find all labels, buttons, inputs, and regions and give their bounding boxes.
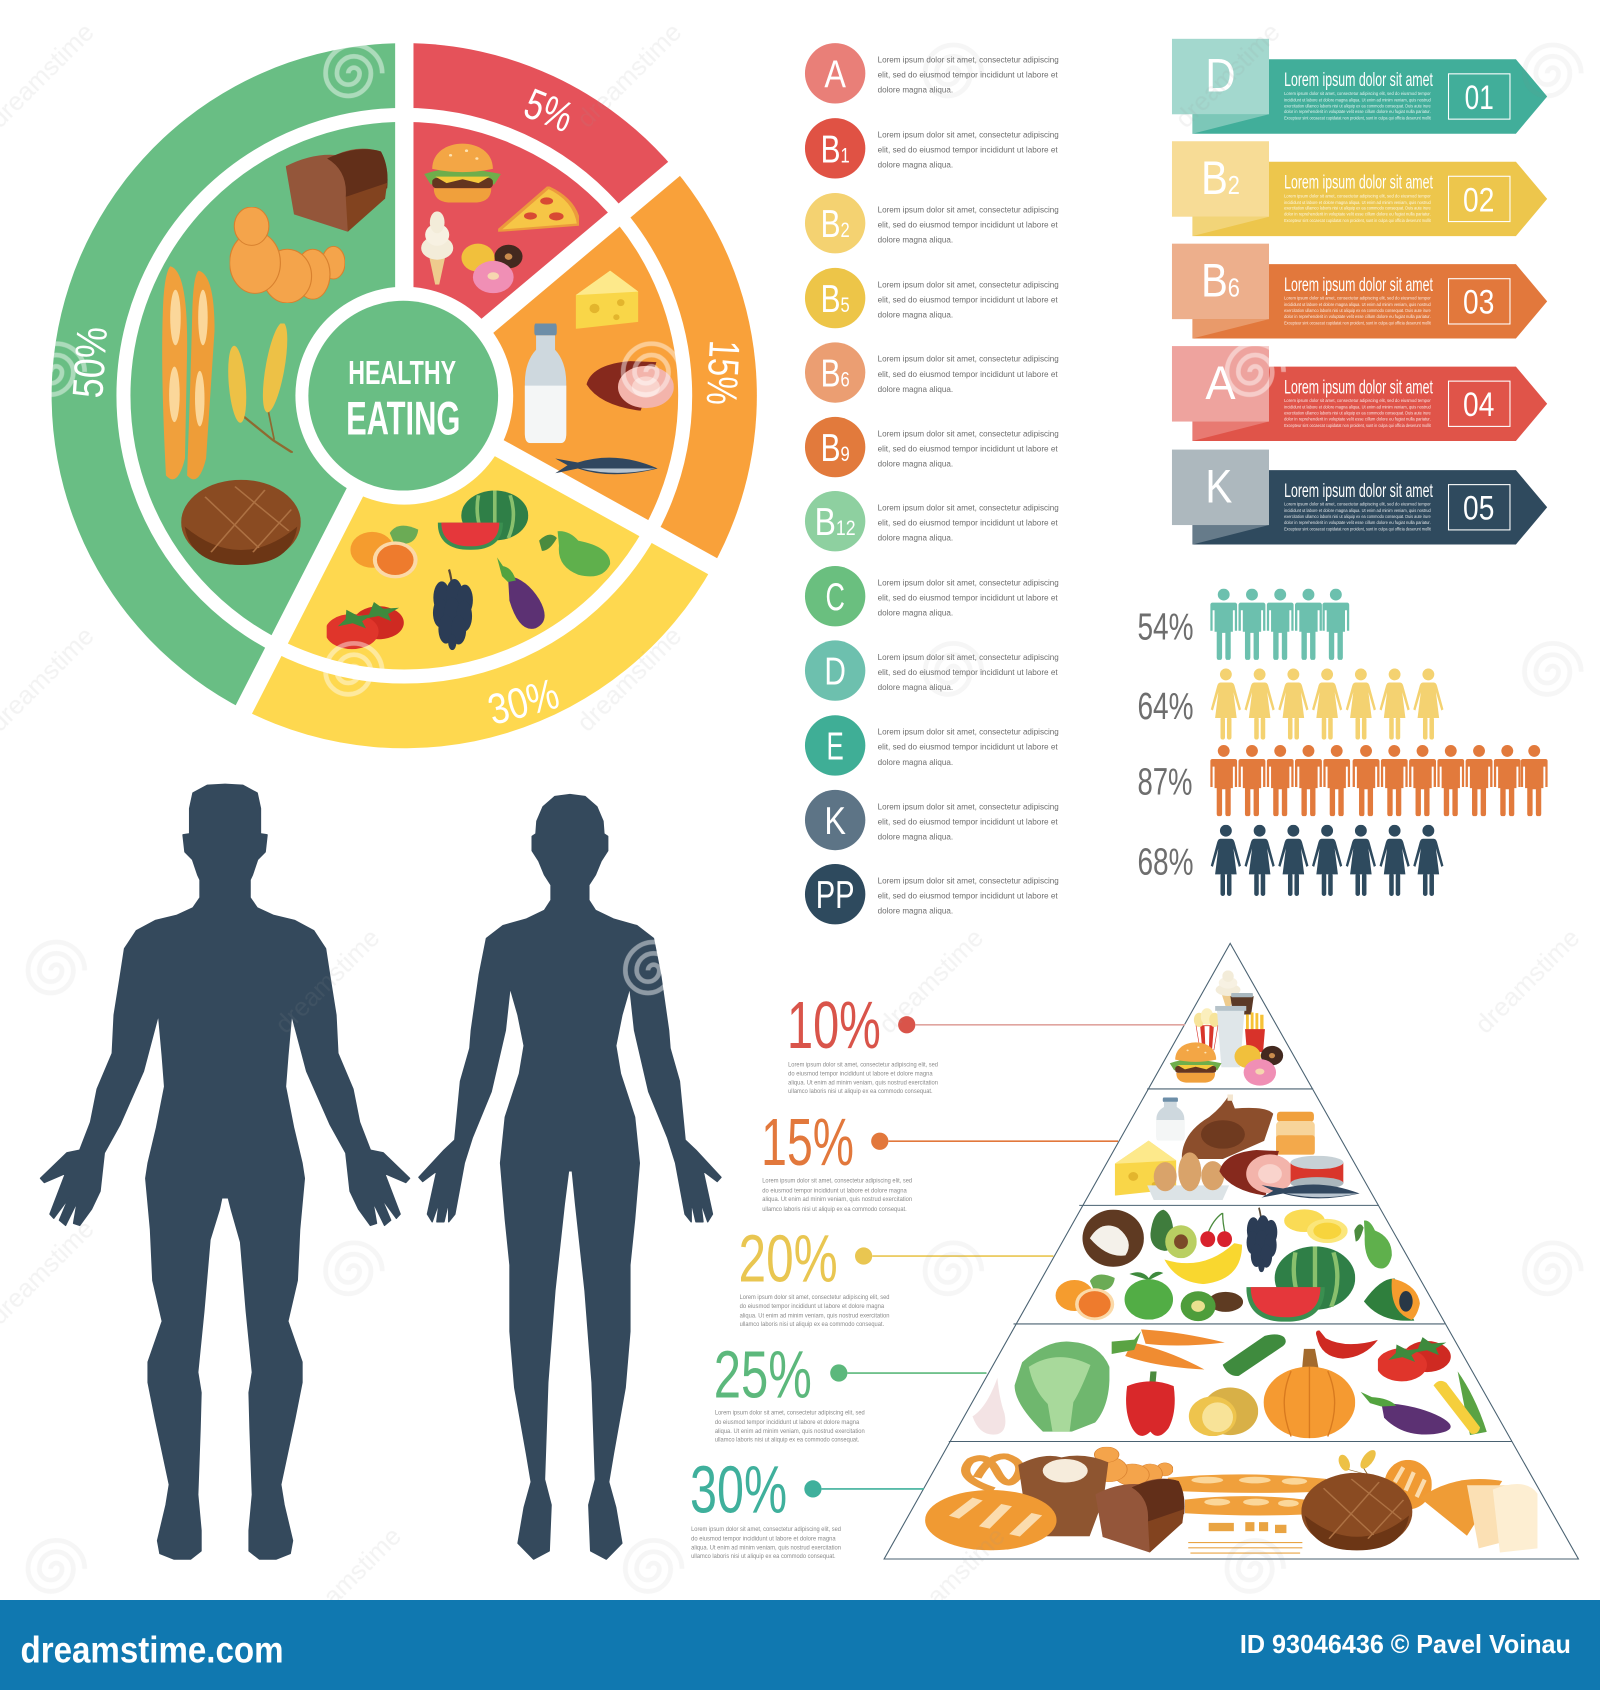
ribbon 01 D: D [1205,50,1236,103]
vitamin B12: elit, sed do eiusmod tempor incididunt ut labore et [878,517,1058,527]
vitamin B6: Lorem ipsum dolor sit amet, consectetur adipiscing [878,354,1059,364]
vitamin B2: dolore magna aliqua. [878,235,953,245]
callout: 15%: Lorem ipsum dolor sit amet, consectetur adipiscing elit, sed [762,1179,912,1185]
chart: food pyramid [884,943,1578,1559]
vitamin PP [805,864,1059,924]
callout: 30%: ullamco laboris nisi ut aliquip ex ea commodo consequat. [691,1554,836,1560]
ribbon 04 A [1172,346,1547,441]
ribbon 05 K: incididunt ut labore et dolore magna aliqua. Ut enim ad minim veniam, quis nostrud [1284,508,1431,514]
icon: fish [555,458,658,474]
vitamin B1: dolore magna aliqua. [878,160,953,170]
vitamin B1: Lorem ipsum dolor sit amet, consectetur adipiscing [878,130,1059,140]
icon: burger [424,144,501,202]
watermark text: dreamstime [572,622,687,737]
icon: baguettes [162,266,215,479]
ribbon 03 B6 [1172,244,1547,339]
ribbon 03 B6: Lorem ipsum dolor sit amet, consectetur adipiscing elit, sed do eiusmod tempor [1284,296,1431,302]
callout: 30%: Lorem ipsum dolor sit amet, consectetur adipiscing elit, sed [691,1527,841,1533]
vitamin K [805,790,1059,850]
vitamin C: Lorem ipsum dolor sit amet, consectetur adipiscing [878,577,1059,587]
callout: 20%: do eiusmod tempor incididunt ut labore et dolore magna [740,1304,885,1310]
row: 68% women [1137,825,1443,896]
vitamin K: elit, sed do eiusmod tempor incididunt ut labore et [878,816,1058,826]
ribbon 02 B2: 02 [1463,181,1494,219]
icon: milk bottle [525,323,566,443]
footer logo: dreamstime.com [20,1630,284,1671]
ribbon 01 D: dolor in reprehenderit in voluptate velit esse cillum dolore eu fugiat nulla pariatur. [1284,109,1431,115]
vitamin B1: B1 [821,128,850,171]
segment: 5% red [404,43,674,396]
vitamin B2: Lorem ipsum dolor sit amet, consectetur adipiscing [878,204,1059,214]
ribbon 01 D: Lorem ipsum dolor sit amet, consectetur adipiscing elit, sed do eiusmod tempor [1284,91,1431,97]
icon: pizza [498,187,579,231]
callout: 15%: do eiusmod tempor incididunt ut labore et dolore magna [762,1188,907,1194]
icon: wheat [225,319,293,453]
callout: 10%: aliqua. Ut enim ad minim veniam, quis nostrud exercitation [788,1081,938,1087]
vitamin B9: B9 [821,427,850,470]
icon: grapes [433,569,473,650]
ribbon 03 B6: B6 [1201,254,1240,307]
ribbon 02 B2: dolor in reprehenderit in voluptate velit esse cillum dolore eu fugiat nulla pariatur. [1284,212,1431,218]
heading: healthy eating [346,355,460,445]
vitamin B9: elit, sed do eiusmod tempor incididunt ut labore et [878,443,1058,453]
icon: oranges [350,526,418,578]
callout: 20%: aliqua. Ut enim ad minim veniam, quis nostrud exercitation [740,1313,889,1319]
callout: 15%: 15% [761,1105,854,1180]
chart: healthy eating wheel [52,27,757,748]
row: 64% women [1137,668,1443,740]
icon: tomatoes [325,602,404,649]
icon: ice cream [421,211,453,285]
ribbon 02 B2: Lorem ipsum dolor sit amet [1284,172,1433,194]
vitamin B12: B12 [815,501,856,544]
vitamin E [805,715,1059,776]
icon: brown loaf [286,149,388,232]
vitamin D: dolore magna aliqua. [878,682,953,692]
ribbon 04 A: dolor in reprehenderit in voluptate velit esse cillum dolore eu fugiat nulla pariatur. [1284,416,1431,422]
callout: 20%: Lorem ipsum dolor sit amet, consectetur adipiscing elit, sed [740,1295,889,1301]
vitamin K: dolore magna aliqua. [878,831,953,841]
ribbon 02 B2: B2 [1201,152,1240,205]
vitamin B6: dolore magna aliqua. [878,384,953,394]
ribbon 01 D: 01 [1465,79,1494,117]
ribbon 04 A: Lorem ipsum dolor sit amet [1284,377,1433,399]
row: 68% women: 68% [1137,840,1194,882]
ribbon 03 B6: exercitation ullamco laboris nisi ut aliquip ex ea commodo consequat. Duis aute irure [1284,308,1431,314]
row: 64% women: 64% [1137,685,1194,727]
vitamin D: elit, sed do eiusmod tempor incididunt ut labore et [878,667,1058,677]
ribbon 05 K: K [1205,460,1233,513]
segment: 15% orange [404,169,757,567]
callout: 25%: do eiusmod tempor incididunt ut labore et dolore magna [715,1420,860,1426]
callout: 20%: ullamco laboris nisi ut aliquip ex ea commodo consequat. [740,1322,884,1328]
label: 50%: 50% [64,325,117,400]
vitamin B5: dolore magna aliqua. [878,310,953,320]
ribbon 03 B6: dolor in reprehenderit in voluptate velit esse cillum dolore eu fugiat nulla pariatur. [1284,314,1431,320]
row: 87% men [1137,745,1548,817]
ribbon 02 B2: Lorem ipsum dolor sit amet, consectetur adipiscing elit, sed do eiusmod tempor [1284,193,1431,199]
chart: people pictograms [1137,589,1548,896]
heading: healthy eating: EATING [346,392,460,445]
label: 5%: 5% [518,80,580,142]
silhouette: male body [41,784,410,1559]
vitamin B2 [805,193,1059,253]
vitamin B1: elit, sed do eiusmod tempor incididunt ut labore et [878,145,1058,155]
watermark text: dreamstime [572,18,687,134]
label: 15%: 15% [697,339,748,406]
vitamin B5: elit, sed do eiusmod tempor incididunt ut labore et [878,294,1058,304]
callout: 15%: aliqua. Ut enim ad minim veniam, quis nostrud exercitation [762,1197,912,1203]
ribbon 02 B2: exercitation ullamco laboris nisi ut aliquip ex ea commodo consequat. Duis aute irure [1284,206,1431,212]
vitamin B12: Lorem ipsum dolor sit amet, consectetur adipiscing [878,502,1059,512]
vitamin A: dolore magna aliqua. [878,85,953,95]
vitamin B1 [805,118,1059,179]
vitamin A: Lorem ipsum dolor sit amet, consectetur adipiscing [878,55,1059,65]
ribbon 04 A: A [1205,357,1236,410]
icon: pear [539,531,610,576]
ribbon 05 K: Lorem ipsum dolor sit amet [1284,480,1433,502]
ribbon 05 K: Lorem ipsum dolor sit amet, consectetur adipiscing elit, sed do eiusmod tempor [1284,502,1431,508]
ribbon 01 D: incididunt ut labore et dolore magna aliqua. Ut enim ad minim veniam, quis nostrud [1284,97,1431,103]
callout: 25%: Lorem ipsum dolor sit amet, consectetur adipiscing elit, sed [715,1411,865,1417]
callout: 30%: aliqua. Ut enim ad minim veniam, quis nostrud exercitation [691,1545,841,1551]
footer band [0,1600,1600,1690]
ribbon 04 A: incididunt ut labore et dolore magna aliqua. Ut enim ad minim veniam, quis nostrud [1284,405,1431,411]
watermark text: dreamstime [1170,18,1286,134]
ribbon 04 A: Lorem ipsum dolor sit amet, consectetur adipiscing elit, sed do eiusmod tempor [1284,398,1431,404]
ribbon 05 K: dolor in reprehenderit in voluptate velit esse cillum dolore eu fugiat nulla pariatur. [1284,520,1431,526]
vitamin D: D [824,651,846,694]
watermark text: dreamstime [1470,924,1585,1039]
vitamin B2: elit, sed do eiusmod tempor incididunt ut labore et [878,219,1058,229]
vitamin A: elit, sed do eiusmod tempor incididunt ut labore et [878,70,1058,80]
callout: 30%: 30% [690,1453,787,1528]
vitamin B5: B5 [821,278,850,321]
callout: 10%: 10% [787,988,881,1063]
vitamin C: dolore magna aliqua. [878,608,953,618]
vitamin K: K [824,800,846,843]
ribbon 02 B2: incididunt ut labore et dolore magna aliqua. Ut enim ad minim veniam, quis nostrud [1284,200,1431,206]
vitamin E: E [827,725,844,768]
callout: 10%: do eiusmod tempor incididunt ut labore et dolore magna [788,1071,933,1077]
icon: round bread [181,480,301,565]
tier 3: fruit [1056,1208,1420,1322]
heading: healthy eating: HEALTHY [348,355,456,392]
silhouette: female body [419,795,721,1559]
vitamin B5 [805,268,1059,328]
ribbon 01 D: Lorem ipsum dolor sit amet [1284,69,1433,91]
callout: 15% [761,1105,1118,1213]
vitamin PP: Lorem ipsum dolor sit amet, consectetur adipiscing [878,875,1059,885]
callout: 25%: aliqua. Ut enim ad minim veniam, quis nostrud exercitation [715,1429,865,1435]
callout: 25% [714,1337,987,1443]
vitamin D [805,640,1059,701]
ribbon 01 D: exercitation ullamco laboris nisi ut aliquip ex ea commodo consequat. Duis aute irure [1284,103,1431,109]
ribbon 05 K: exercitation ullamco laboris nisi ut aliquip ex ea commodo consequat. Duis aute irure [1284,514,1431,520]
vitamin B12 [805,491,1059,551]
ribbon 05 K: 05 [1463,490,1494,528]
watermark text: dreamstime [270,924,385,1039]
row: 54% men: 54% [1137,605,1194,647]
callout: 15%: ullamco laboris nisi ut aliquip ex ea commodo consequat. [762,1207,907,1213]
ribbon 03 B6: Excepteur sint occaecat cupidatat non proident, sunt in culpa qui officia deserunt mollit [1284,321,1431,327]
watermark text: dreamstime [895,1522,1011,1638]
vitamin B6 [805,342,1059,403]
ribbon 04 A: exercitation ullamco laboris nisi ut aliquip ex ea commodo consequat. Duis aute irure [1284,411,1431,417]
callout: 25%: 25% [714,1337,812,1412]
vitamin A [805,43,1059,104]
watermark text: dreamstime [292,1522,407,1638]
ribbon 04 A: Excepteur sint occaecat cupidatat non proident, sunt in culpa qui officia deserunt mollit [1284,423,1431,429]
callout: 10% [787,988,1185,1095]
vitamin D: Lorem ipsum dolor sit amet, consectetur adipiscing [878,652,1059,662]
icon: eggplant [497,557,545,629]
vitamin B5: Lorem ipsum dolor sit amet, consectetur adipiscing [878,279,1059,289]
list: vitamins [805,43,1059,924]
center circle [308,301,498,491]
ribbon 01 D [1172,39,1547,134]
vitamin B9: dolore magna aliqua. [878,459,953,469]
ribbon 03 B6: 03 [1463,284,1494,322]
watermark text: dreamstime [874,924,989,1039]
icon: cheese [576,271,638,329]
segment: 30% yellow [244,396,713,748]
vitamin B6: elit, sed do eiusmod tempor incididunt ut labore et [878,369,1058,379]
vitamin PP: elit, sed do eiusmod tempor incididunt ut labore et [878,891,1058,901]
label: 30%: 30% [483,670,564,735]
panel: numbered ribbons [1172,39,1547,544]
row: 54% men [1137,589,1349,660]
tier 1: sweets and fast food [1170,970,1283,1086]
ribbon 03 B6: Lorem ipsum dolor sit amet [1284,274,1433,296]
vitamin E: Lorem ipsum dolor sit amet, consectetur adipiscing [878,727,1059,737]
callout: 10%: ullamco laboris nisi ut aliquip ex ea commodo consequat. [788,1089,933,1095]
icon: croissant [230,207,345,303]
ribbon 02 B2 [1172,141,1547,236]
vitamin A: A [824,53,846,96]
ribbon 02 B2: Excepteur sint occaecat cupidatat non proident, sunt in culpa qui officia deserunt mollit [1284,218,1431,224]
vitamin E: elit, sed do eiusmod tempor incididunt ut labore et [878,742,1058,752]
ribbon 03 B6: incididunt ut labore et dolore magna aliqua. Ut enim ad minim veniam, quis nostrud [1284,302,1431,308]
pyramid outline and tiers [884,943,1578,1559]
vitamin C: elit, sed do eiusmod tempor incididunt ut labore et [878,593,1058,603]
vitamin C [805,566,1059,626]
vitamin B2: B2 [821,203,850,246]
vitamin B9: Lorem ipsum dolor sit amet, consectetur adipiscing [878,428,1059,438]
vitamin PP: dolore magna aliqua. [878,906,953,916]
callout: 30%: do eiusmod tempor incididunt ut labore et dolore magna [691,1537,836,1543]
row: 87% men: 87% [1137,761,1192,803]
callout: 25%: ullamco laboris nisi ut aliquip ex ea commodo consequat. [715,1437,860,1443]
vitamin PP: PP [816,874,855,917]
callout: 20%: 20% [739,1222,838,1297]
ribbon 01 D: Excepteur sint occaecat cupidatat non proident, sunt in culpa qui officia deserunt mollit [1284,116,1431,122]
vitamin K: Lorem ipsum dolor sit amet, consectetur adipiscing [878,801,1059,811]
callout: 20% [739,1222,1053,1328]
ribbon 04 A: 04 [1463,386,1494,424]
callout: 30% [690,1453,924,1560]
tier 2: protein and dairy [1115,1094,1360,1200]
vitamin B12: dolore magna aliqua. [878,533,953,543]
tier 5: bread and grains [925,1447,1537,1553]
icon: ham [587,361,674,411]
vitamin E: dolore magna aliqua. [878,757,953,767]
icon: watermelon [438,491,528,550]
ribbon 05 K: Excepteur sint occaecat cupidatat non proident, sunt in culpa qui officia deserunt mollit [1284,526,1431,532]
vitamin C: C [825,576,845,619]
vitamin B6: B6 [821,353,850,396]
vitamin B9 [805,417,1059,477]
icon: donuts [461,244,523,293]
callout: 10%: Lorem ipsum dolor sit amet, consectetur adipiscing elit, sed [788,1062,938,1068]
tier 4: vegetables [973,1329,1487,1438]
ribbon 05 K [1172,450,1547,544]
footer credit: ID 93046436 © Pavel Voinau [1240,1631,1571,1659]
segment: 50% green [52,43,404,710]
